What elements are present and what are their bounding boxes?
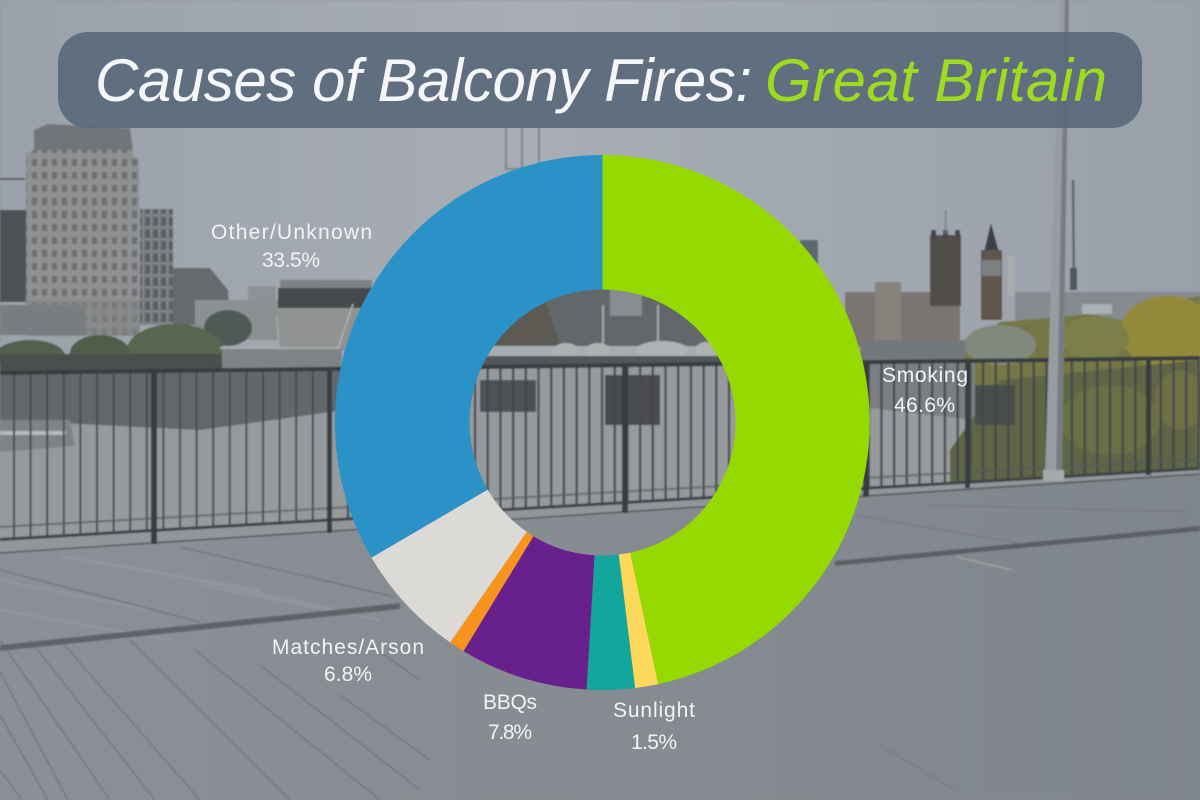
river (0, 360, 975, 555)
label: smoking: Smoking (882, 364, 968, 387)
victoria tower (930, 210, 961, 306)
donut chart: causes of balcony fires (335, 155, 870, 690)
deck shadow (0, 603, 400, 651)
segment: matches/arson (372, 490, 527, 642)
boats and arches behind railing (480, 341, 736, 425)
neighbouring buildings (0, 178, 280, 340)
label: bbqs (483, 691, 537, 744)
crane (1070, 180, 1077, 290)
segment: smoking (602, 155, 870, 684)
railing balusters (0, 358, 1200, 539)
footbridge left (220, 304, 353, 368)
label: smoking (882, 364, 968, 417)
trees on far bank (0, 310, 252, 376)
label: other/unknown: Other/Unknown (211, 221, 372, 244)
foliage behind right railing (950, 360, 1200, 488)
label: matches/arson (272, 636, 424, 686)
segment: other/unknown (335, 155, 602, 558)
label: other/unknown (211, 221, 372, 272)
label: matches/arson: 6.8% (324, 663, 372, 686)
tall riverside tower (26, 124, 140, 336)
london eye (506, 125, 539, 169)
segment: teal sliver (587, 554, 635, 690)
segment: sunlight (619, 553, 658, 688)
sky (0, 0, 1200, 400)
city low band and trees right (860, 292, 1200, 490)
lamp pole (1043, 0, 1069, 481)
label: smoking: 46.6% (894, 394, 955, 417)
segment: bbqs (464, 536, 595, 690)
label: bbqs: BBQs (483, 691, 537, 714)
label: sunlight: Sunlight (613, 699, 695, 722)
skyline seen through centre of ring (470, 288, 740, 356)
label: sunlight (613, 699, 695, 754)
title banner (58, 32, 1142, 128)
deck (0, 468, 1200, 800)
label: other/unknown: 33.5% (262, 249, 320, 272)
label: matches/arson: Matches/Arson (272, 636, 424, 659)
banner pill (58, 32, 1142, 128)
title highlight: Great Britain (765, 47, 1107, 114)
elizabeth tower (981, 223, 1015, 320)
title text: Causes of Balcony Fires: (95, 47, 752, 114)
segment: orange sliver (450, 532, 533, 651)
label: sunlight: 1.5% (631, 731, 677, 754)
railing rails and posts (0, 356, 1200, 544)
county hall (278, 280, 372, 350)
label: bbqs: 7.8% (488, 721, 532, 744)
far buildings (800, 240, 960, 347)
